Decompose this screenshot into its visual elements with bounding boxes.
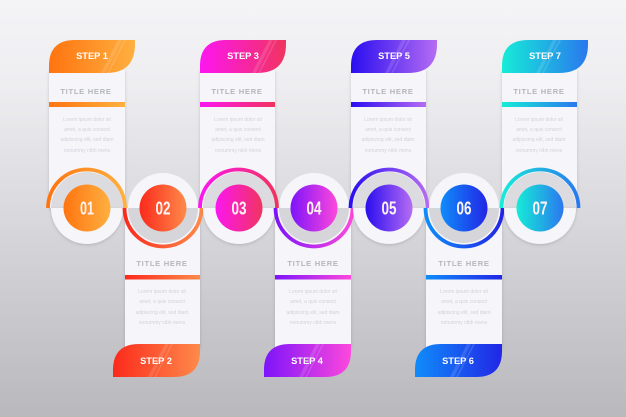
panel: step 7: adipiscing elit, sed diam [512, 137, 566, 143]
panel: step 1: amet, a quis consect [64, 127, 111, 133]
panel: step 6: amet, a quis consect [441, 299, 488, 305]
node 05: 05 [382, 198, 396, 218]
panel: step 2: amet, a quis consect [139, 299, 186, 305]
panel: step 6: adipiscing elit, sed diam [437, 310, 491, 316]
panel: step 1: STEP 1 [76, 51, 108, 61]
panel: step 1: adipiscing elit, sed diam [60, 137, 114, 143]
panel: step 1: Lorem ipsum dolor sit [63, 117, 112, 123]
panel: step 5: Lorem ipsum dolor sit [364, 117, 413, 123]
panel: step 2: Lorem ipsum dolor sit [138, 289, 187, 295]
panel: step 2: STEP 2 [140, 356, 172, 366]
panel: step 6: TITLE HERE [438, 259, 490, 268]
panel: step 4 [264, 208, 351, 377]
node 02 [124, 173, 202, 246]
node 01 [48, 170, 125, 244]
node 02: 02 [156, 198, 170, 218]
panel: step 7 [502, 40, 588, 208]
panel: step 5: STEP 5 [378, 51, 410, 61]
panel: step 5 [351, 40, 437, 208]
panel: step 5: TITLE HERE [362, 87, 414, 96]
panel: step 1: nonummy nibh mens [64, 148, 111, 154]
node 04 [276, 173, 352, 246]
panel: step 2: adipiscing elit, sed diam [135, 310, 189, 316]
panel: step 6 [415, 208, 502, 377]
panel: step 5: adipiscing elit, sed diam [361, 137, 415, 143]
panel: step 4: STEP 4 [291, 356, 324, 366]
panel: step 7: nonummy nibh mens [516, 148, 563, 154]
panel: step 7: Lorem ipsum dolor sit [515, 117, 564, 123]
step 1 tab [49, 40, 135, 73]
panel: step 1 [49, 40, 135, 208]
node 07: 07 [532, 198, 548, 218]
panel: step 5: amet, a quis consect [365, 127, 412, 133]
panel: step 3: TITLE HERE [211, 87, 263, 96]
node 04: 04 [306, 198, 322, 218]
node 05 [350, 170, 428, 244]
panel: step 2 [113, 208, 200, 377]
panel: step 3 [200, 40, 286, 208]
node 03: 03 [232, 198, 246, 218]
panel: step 2: nonummy nibh mens [139, 320, 186, 326]
panel: step 4: adipiscing elit, sed diam [286, 310, 340, 316]
step 5 tab [351, 40, 437, 73]
panel: step 6: STEP 6 [442, 356, 474, 366]
node 01: 01 [80, 198, 94, 218]
panel: step 4: Lorem ipsum dolor sit [289, 289, 338, 295]
node 03 [200, 170, 277, 244]
step 7 tab [502, 40, 588, 73]
panel: step 3: Lorem ipsum dolor sit [214, 117, 263, 123]
step 6 tab [415, 344, 502, 377]
panel: step 3: adipiscing elit, sed diam [211, 137, 265, 143]
panel: step 3: nonummy nibh mens [215, 148, 262, 154]
panel: step 3: amet, a quis consect [215, 127, 262, 133]
step 2 tab [113, 344, 200, 377]
panel: step 4: nonummy nibh mens [290, 320, 337, 326]
panel: step 2: TITLE HERE [136, 259, 188, 268]
panel: step 3: STEP 3 [227, 51, 259, 61]
panel: step 6: Lorem ipsum dolor sit [440, 289, 489, 295]
panel: step 4: TITLE HERE [287, 259, 339, 268]
node 06: 06 [456, 198, 472, 218]
step 3 tab [200, 40, 286, 73]
panel: step 6: nonummy nibh mens [441, 320, 488, 326]
step 4 tab [264, 344, 351, 377]
node 06 [426, 173, 502, 246]
panel: step 5: nonummy nibh mens [365, 148, 412, 154]
panel: step 7: TITLE HERE [513, 87, 565, 96]
panel: step 7: amet, a quis consect [516, 127, 563, 133]
node 07 [502, 170, 578, 244]
panel: step 4: amet, a quis consect [290, 299, 337, 305]
panel: step 1: TITLE HERE [60, 87, 112, 96]
panel: step 7: STEP 7 [529, 51, 561, 61]
